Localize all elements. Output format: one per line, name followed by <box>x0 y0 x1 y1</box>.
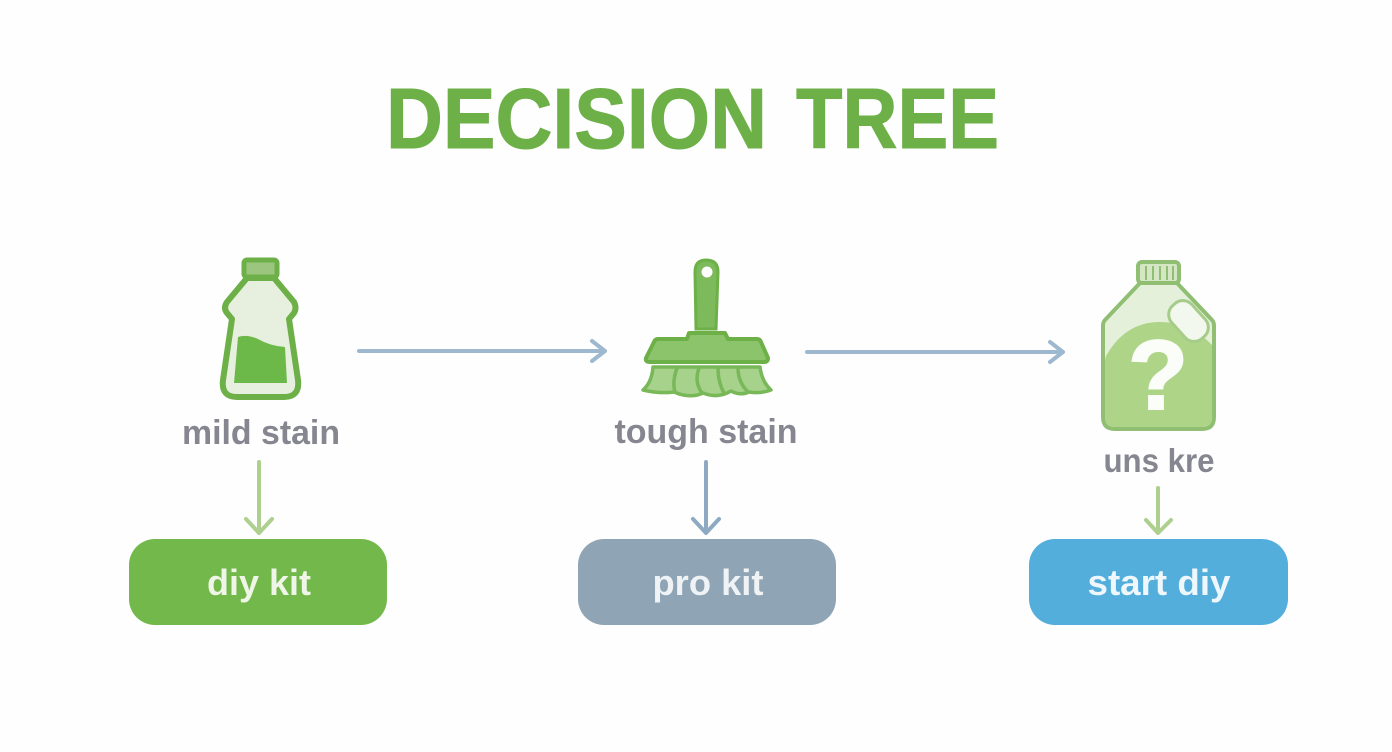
button: diy kit <box>129 539 387 625</box>
title: TREE <box>796 72 999 167</box>
icon: question mark: ? <box>1128 320 1188 430</box>
button: pro kit <box>578 539 836 625</box>
label: tough stain: tough stain <box>614 413 798 451</box>
button: diy kit: diy kit <box>207 562 311 603</box>
button: start diy: start diy <box>1088 562 1230 603</box>
icon: mild stain bottle <box>223 260 298 397</box>
icon: tough stain brush <box>643 260 771 396</box>
arrow: tough stain to unsure <box>807 342 1063 362</box>
button: pro kit: pro kit <box>652 562 764 603</box>
arrow: mild stain to tough stain <box>359 341 605 361</box>
title: DECISION <box>386 72 767 167</box>
arrow: tough stain to pro kit <box>693 462 719 533</box>
button: start diy <box>1029 539 1288 625</box>
title <box>386 72 999 167</box>
arrow: mild stain to diy kit <box>246 462 272 533</box>
icon: unsure jug <box>1103 262 1214 430</box>
label: unsure: uns kre <box>1104 442 1214 479</box>
label: mild stain: mild stain <box>182 414 340 452</box>
arrow: unsure to start diy <box>1146 488 1171 533</box>
